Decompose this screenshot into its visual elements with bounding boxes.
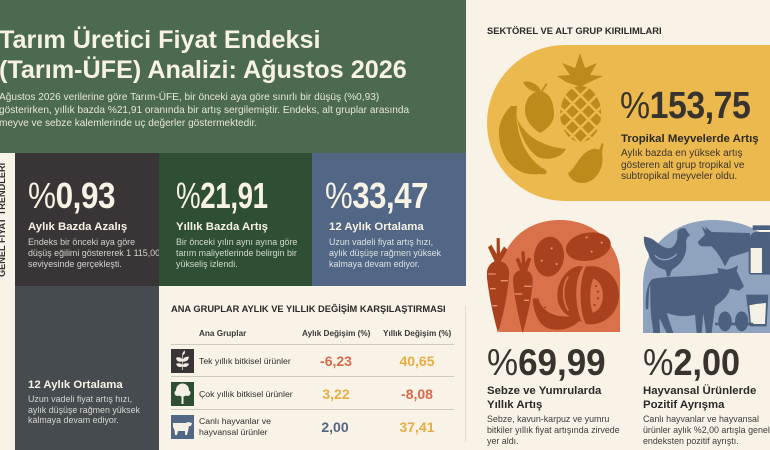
icon: tropical fruits (499, 53, 604, 183)
stat: %69,99 (487, 342, 606, 383)
heading: Yıllık Bazda Artış (176, 221, 268, 233)
column headers: Aylık Değişim (%) (302, 329, 370, 338)
monthly value: 3,22 (322, 386, 350, 402)
description: yükseliş izlendi. (176, 259, 238, 269)
panel: vegetables (487, 220, 620, 446)
description: Canlı hayvanlar ve hayvansal (643, 414, 759, 424)
yearly value: 40,65 (399, 353, 435, 369)
illustration: vegetables (487, 220, 620, 333)
heading: Tropikal Meyvelerde Artış (621, 133, 759, 145)
stat: %0,93 (28, 175, 115, 216)
row: perennial crops (171, 382, 433, 406)
column headers (199, 329, 451, 338)
panel: yearly increase (159, 153, 312, 286)
description (176, 237, 297, 269)
stat: %2,00 (643, 342, 740, 383)
stat: %153,75 (620, 85, 750, 127)
description (28, 237, 160, 269)
description: ürünler aylık %2,00 artışla genel (643, 425, 770, 435)
heading (643, 384, 756, 410)
title: (Tarım-ÜFE) Analizi: Ağustos 2026 (0, 56, 407, 84)
stat: %21,91 (176, 175, 268, 216)
label: Tek yıllık bitkisel ürünler (199, 356, 291, 366)
yearly value: -8,08 (401, 386, 433, 402)
row: livestock (171, 415, 435, 439)
description (28, 394, 140, 425)
panel: header (0, 0, 466, 153)
description (329, 237, 441, 269)
title: Tarım Üretici Fiyat Endeksi (0, 26, 320, 54)
description: aylık düşüşe rağmen yüksek (28, 405, 140, 415)
heading: 12 Aylık Ortalama (329, 221, 424, 233)
panel: monthly decrease (15, 153, 159, 286)
description: yer aldı. (487, 436, 519, 446)
intro text: meyve ve sebze kalemlerinde uç değerler göstermektedir. (0, 118, 257, 129)
heading: Yıllık Artış (487, 398, 542, 410)
description: Uzun vadeli fiyat artış hızı, (28, 394, 132, 404)
description (643, 414, 770, 446)
section heading: SEKTÖREL VE ALT GRUP KIRILIMLARI (487, 25, 662, 36)
intro text: Ağustos 2026 verilerine göre Tarım-ÜFE, bir önceki aya göre sınırlı bir düşüş (%0,93) (0, 92, 379, 103)
label: Çok yıllık bitkisel ürünler (199, 389, 293, 399)
intro text (0, 92, 410, 129)
panel: comparison table (159, 286, 466, 450)
heading: Pozitif Ayrışma (643, 398, 724, 410)
title (0, 26, 407, 84)
description: aylık düşüşe rağmen yüksek (329, 248, 441, 258)
monthly value: -6,23 (320, 353, 352, 369)
description: kalmaya devam ediyor. (28, 415, 119, 425)
description: kalmaya devam ediyor. (329, 259, 420, 269)
heading: Sebze ve Yumrularda (487, 385, 601, 397)
description: Uzun vadeli fiyat artış hızı, (329, 237, 433, 247)
illustration: animals (643, 220, 770, 333)
icon: plant (171, 349, 194, 373)
monthly value: 2,00 (321, 419, 349, 435)
row: annual crops (171, 349, 435, 373)
description: subtropikal meyveler oldu. (621, 171, 737, 182)
panel: lower average (15, 286, 159, 450)
description: gösteren alt grup tropikal ve (621, 160, 744, 171)
description: tarım maliyetlerinde belirgin bir (176, 248, 297, 258)
label (199, 416, 271, 437)
description (621, 148, 744, 182)
yearly value: 37,41 (399, 419, 435, 435)
heading (487, 385, 602, 410)
table heading: ANA GRUPLAR AYLIK VE YILLIK DEĞİŞİM KARŞILAŞTIRMASI (171, 304, 446, 314)
icon: cow (171, 415, 194, 439)
panel: tropical fruit (487, 45, 770, 201)
description (487, 414, 620, 446)
heading: 12 Aylık Ortalama (28, 379, 123, 391)
column headers: Yıllık Değişim (%) (383, 329, 451, 338)
intro text: gösterirken, yıllık bazda %21,91 oranında bir artış sergilemiştir. Endeks, alt gruplar arasında (0, 105, 409, 116)
description: Sebze, kavun-karpuz ve yumru (487, 414, 609, 424)
description: Bir önceki yılın aynı ayına göre (176, 237, 297, 247)
description: Aylık bazda en yüksek artış (621, 148, 743, 159)
label: Canlı hayvanlar ve (199, 416, 271, 426)
description: seviyesinde gerçekleşti. (28, 259, 122, 269)
panel: 12 month average (312, 153, 466, 286)
column headers: Ana Gruplar (199, 329, 246, 338)
description: bitkiler yıllık fiyat artışında zirvede (487, 425, 620, 435)
heading: Aylık Bazda Azalış (28, 221, 127, 233)
icon: tree (171, 382, 194, 406)
description: düşüş eğilimi göstererek 1 115,00 (28, 248, 160, 258)
label: hayvansal ürünler (199, 427, 268, 437)
panel: animal products (643, 220, 770, 446)
description: endeksten pozitif ayrıştı. (643, 436, 739, 446)
heading: Hayvansal Ürünlerde (643, 385, 756, 397)
stat: %33,47 (325, 175, 428, 216)
description: Endeks bir önceki aya göre (28, 237, 135, 247)
